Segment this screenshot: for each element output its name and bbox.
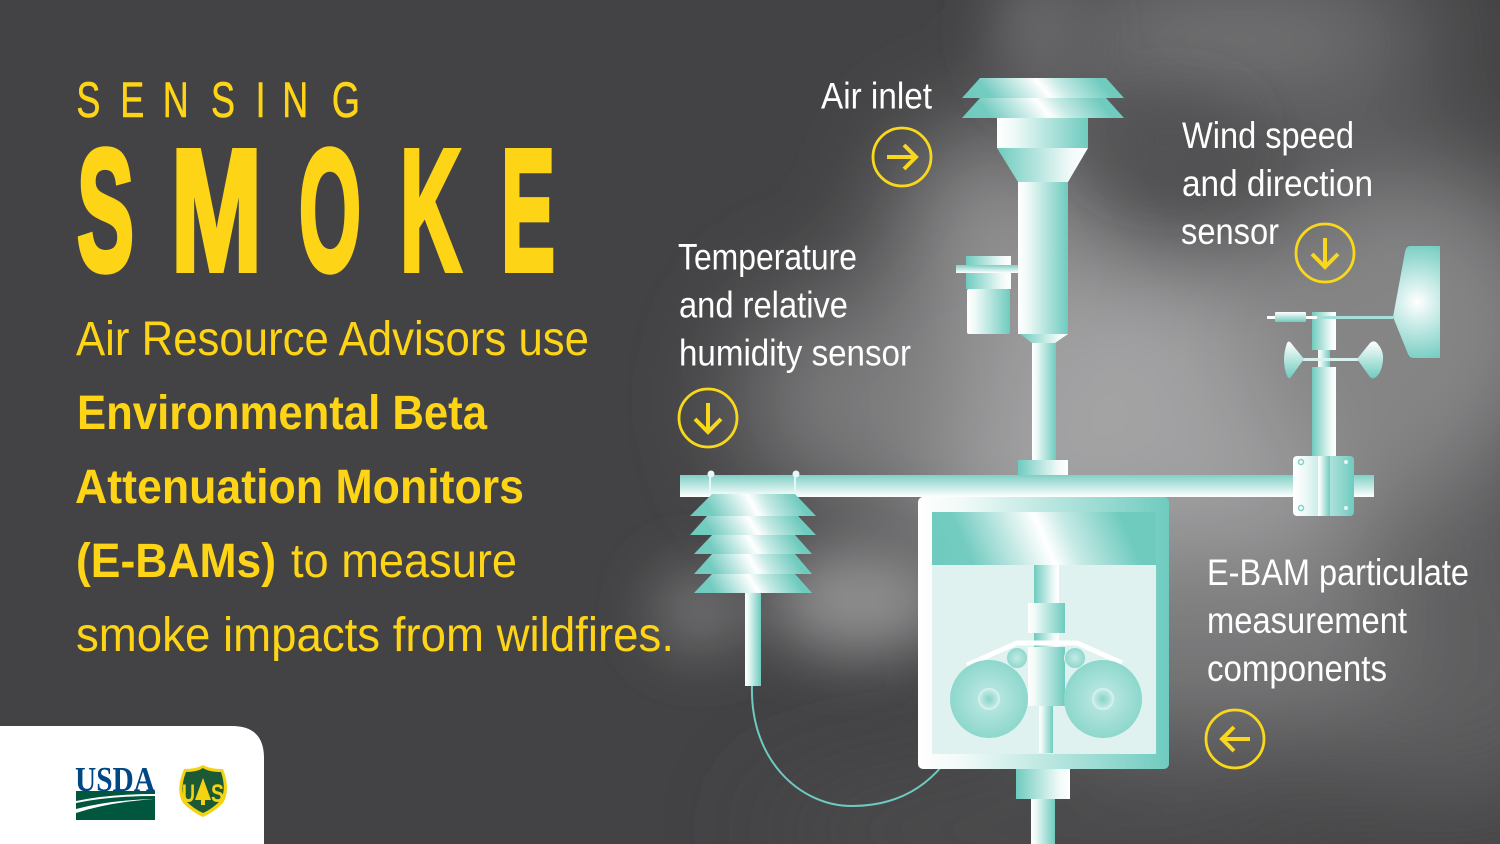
label: wind speed and direction sensor xyxy=(1181,115,1373,252)
logo: Forest Service shield: S xyxy=(211,780,224,808)
label: wind speed and direction sensor: Wind speed xyxy=(1182,115,1354,156)
intro text block: smoke impacts from wildfires. xyxy=(76,609,674,662)
intro text block: Environmental Beta xyxy=(77,387,487,440)
label: temperature and relative humidity sensor: and relative xyxy=(679,284,848,326)
guide rollers xyxy=(1006,648,1086,668)
left wind cup xyxy=(1284,342,1304,378)
label: E-BAM particulate measurement components: components xyxy=(1207,648,1387,689)
label: temperature and relative humidity sensor: Temperature xyxy=(678,236,857,278)
intro text block: Air Resource Advisors use xyxy=(76,313,589,366)
title line: sensing: SENSING xyxy=(76,73,360,128)
intro text block: to measure xyxy=(291,535,517,588)
right tape reel xyxy=(1064,660,1142,738)
label: E-BAM particulate measurement components: measurement xyxy=(1207,600,1408,641)
icon: arrow down for temperature sensor xyxy=(679,389,737,447)
icon: arrow down for wind sensor xyxy=(1296,224,1354,282)
logo: Forest Service shield: U xyxy=(182,780,195,808)
cup axle xyxy=(1303,358,1358,361)
right wind cup xyxy=(1357,341,1383,378)
title line: smoke: O xyxy=(299,113,361,307)
logo: Forest Service shield xyxy=(179,765,227,817)
label: E-BAM particulate measurement components: E-BAM particulate xyxy=(1207,552,1469,593)
label: E-BAM particulate measurement components xyxy=(1207,552,1469,689)
cable from temperature sensor to E-BAM xyxy=(752,686,942,806)
label: temperature and relative humidity sensor xyxy=(678,236,911,374)
lower tube and block xyxy=(1039,706,1053,753)
logo: USDA xyxy=(75,760,156,820)
title line: smoke: M xyxy=(171,113,262,307)
intro text block xyxy=(75,313,674,662)
illustration: small sensor on inlet tube xyxy=(956,256,1018,334)
illustration: horizontal crossbar xyxy=(680,475,1374,497)
top panel xyxy=(932,512,1156,565)
icon: arrow left for E-BAM components xyxy=(1206,710,1264,768)
illustration: wind sensor xyxy=(1267,246,1440,457)
label: air inlet: Air inlet xyxy=(821,76,933,116)
tape path xyxy=(967,643,1122,665)
title line: smoke: S xyxy=(77,113,134,307)
illustration: bracket with screws xyxy=(1293,456,1354,516)
intro text block: (E-BAMs) xyxy=(76,535,276,588)
wind vane xyxy=(1393,246,1440,358)
label: wind speed and direction sensor: sensor xyxy=(1181,211,1279,252)
intro text block: Attenuation Monitors xyxy=(75,461,524,514)
tube and collar xyxy=(1034,565,1059,603)
title xyxy=(76,73,555,307)
left tape reel xyxy=(950,660,1028,738)
text: E xyxy=(501,113,555,307)
label: wind speed and direction sensor: and direction xyxy=(1182,163,1373,204)
illustration: air inlet assembly xyxy=(962,78,1124,476)
title line: smoke: K xyxy=(400,113,461,307)
inner window xyxy=(932,565,1156,754)
icon: arrow right for air inlet xyxy=(873,128,931,186)
logo panel xyxy=(0,726,264,844)
logo: USDA: USDA xyxy=(75,760,156,799)
illustration: temperature and humidity shield xyxy=(690,470,816,686)
label: temperature and relative humidity sensor: humidity sensor xyxy=(679,332,911,374)
illustration: E-BAM enclosure xyxy=(918,497,1169,769)
illustration: lower post xyxy=(1016,769,1070,844)
